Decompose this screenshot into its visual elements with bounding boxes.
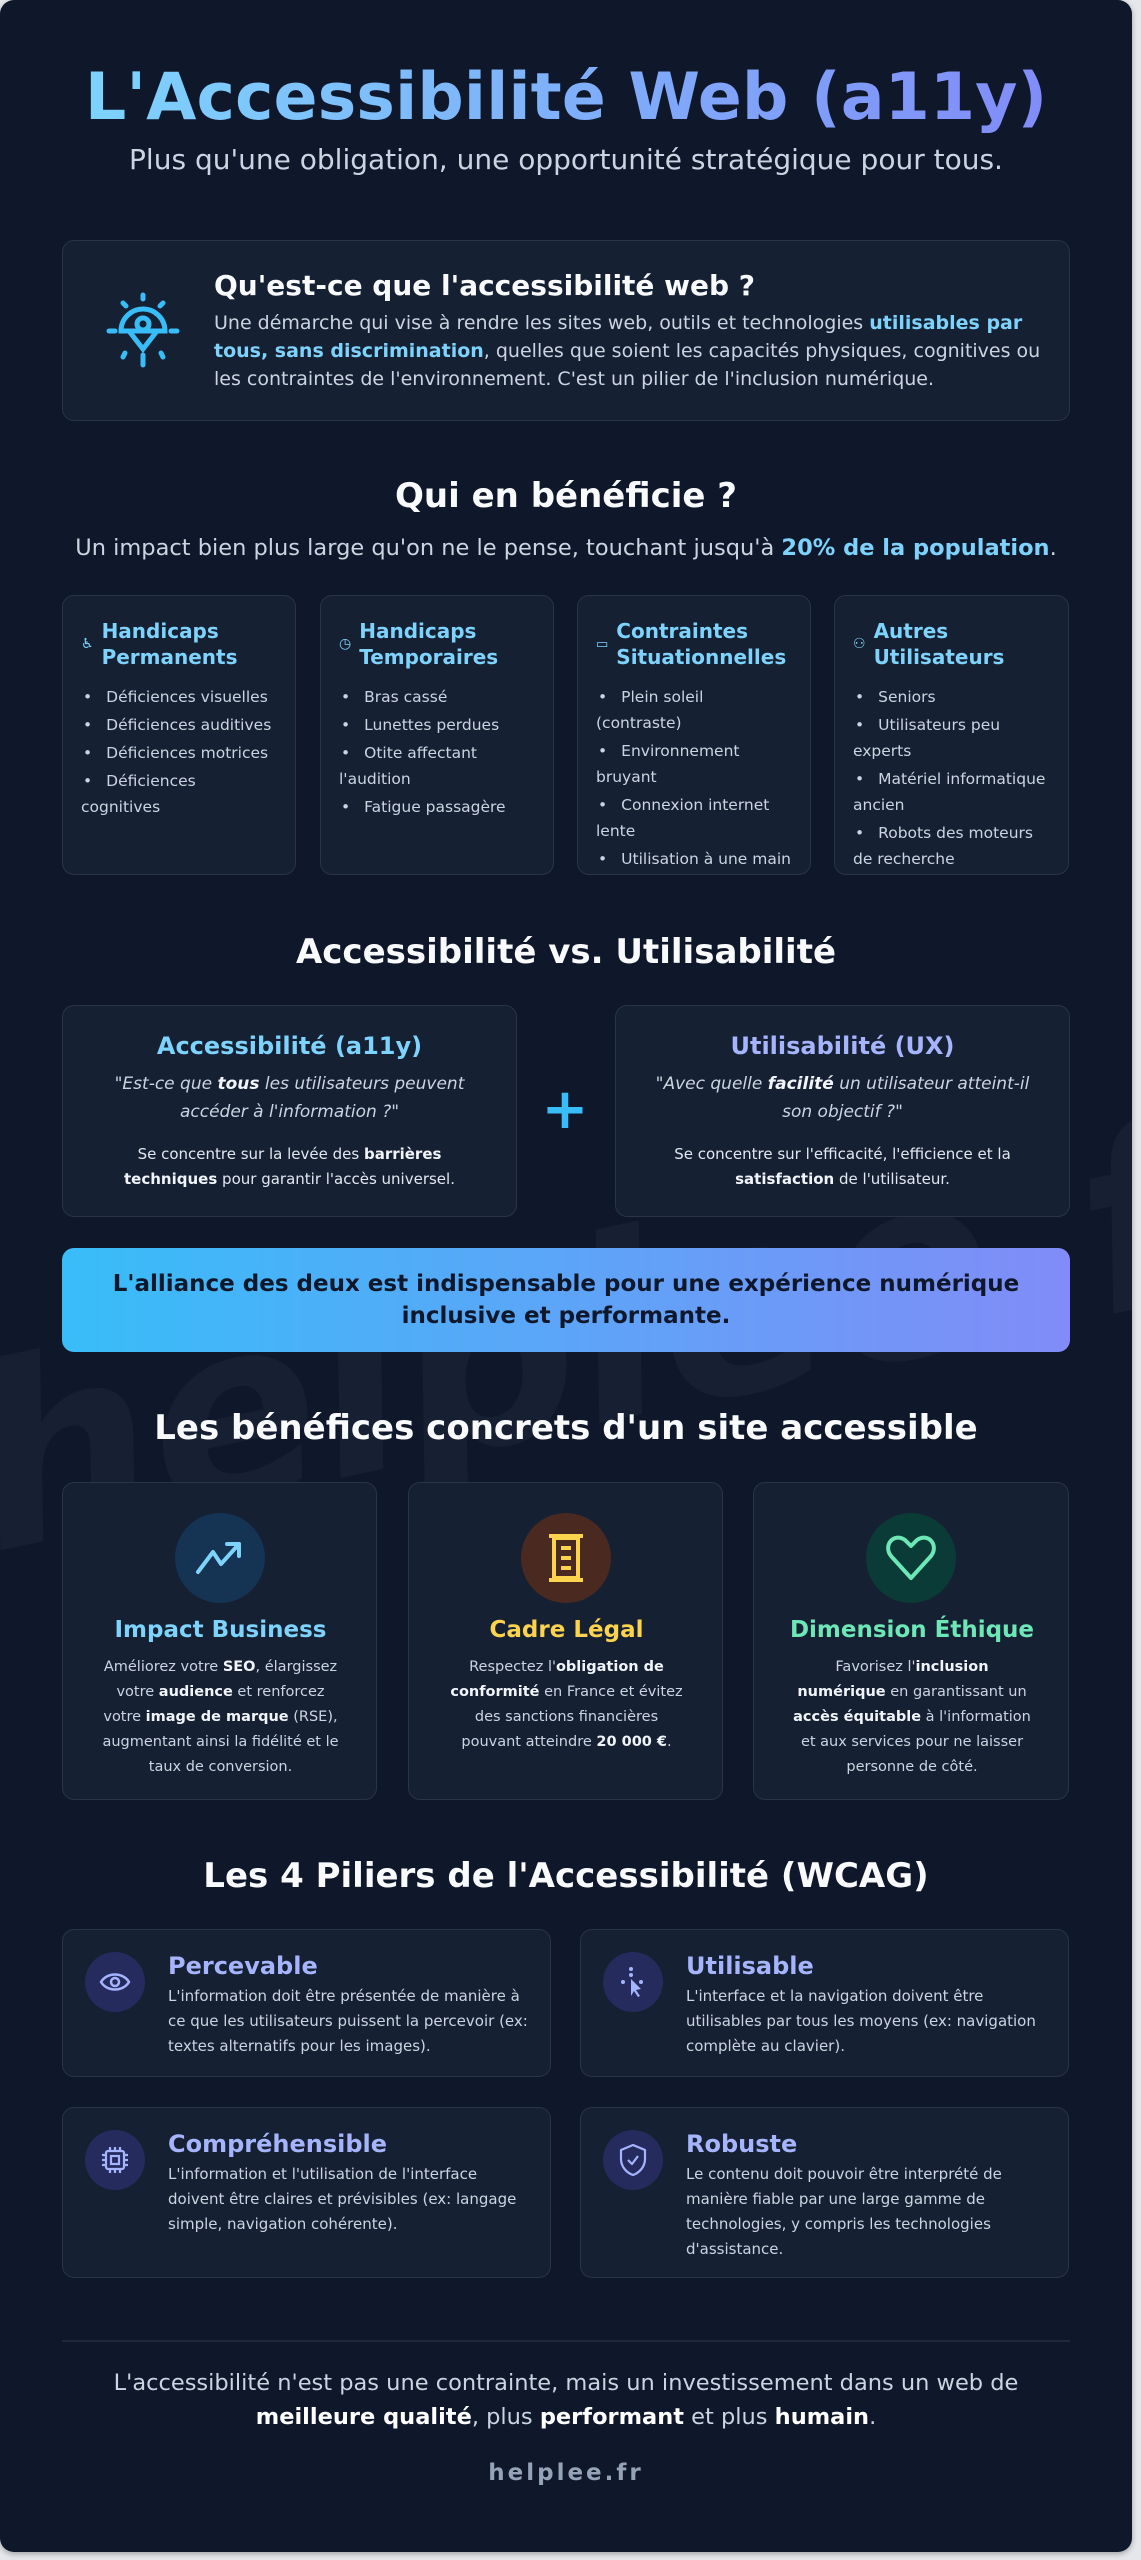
panel: utilisable: Utilisable	[686, 1952, 814, 1980]
panel: situationnelles: Situationnelles	[616, 645, 786, 669]
heading: bénéfices: Les bénéfices concrets d'un site accessible	[154, 1408, 978, 1448]
panel: percevable	[62, 1929, 551, 2077]
panel: autres: Seniors	[878, 688, 936, 706]
panel: permanents: ♿	[81, 636, 94, 652]
panel: légal: pouvant atteindre 20 000 €.	[461, 1734, 672, 1750]
panel: situationnelles	[577, 595, 811, 875]
panel: permanents: Déficiences cognitives	[81, 772, 196, 816]
panel: situationnelles: ▭	[596, 636, 608, 652]
icon: pointer	[603, 1952, 663, 2012]
panel: temporaires: Temporaires	[359, 645, 498, 669]
panel: compréhensible: Compréhensible	[168, 2130, 387, 2158]
panel: business: Impact Business	[114, 1617, 326, 1643]
title: L'Accessibilité Web (a11y)	[85, 60, 1047, 135]
panel: autres: Robots des moteurs de recherche	[853, 824, 1033, 868]
panel: temporaires: Handicaps	[359, 619, 476, 643]
heading: piliers WCAG: Les 4 Piliers de l'Accessibilité (WCAG)	[203, 1856, 929, 1896]
panel: permanents: Permanents	[102, 645, 238, 669]
icon: chip	[85, 2130, 145, 2190]
panel: percevable: Percevable	[168, 1952, 318, 1980]
icon: shield	[603, 2130, 663, 2190]
icon: heart	[866, 1513, 956, 1603]
panel: temporaires: Otite affectant l'audition	[339, 744, 477, 788]
panel: éthique: numérique en garantissant un accès équitable à l'information et aux services pour ne laisser personne de côté.	[793, 1684, 1031, 1775]
subheading: Un impact bien plus large qu'on ne le pense, touchant jusqu'à 20% de la population.	[75, 535, 1057, 561]
footer conclusion: L'accessibilité n'est pas une contrainte, mais un investissement dans un web de meilleure qualité, plus performant et plus humain.	[114, 2370, 1018, 2430]
panel: permanents: Déficiences motrices	[106, 744, 268, 762]
panel: compréhensible: L'information et l'utilisation de l'interface doivent être claires et prévisibles (ex: langage simple, navigation cohérente).	[168, 2165, 516, 2233]
icon: eye	[85, 1952, 145, 2012]
panel: business: Améliorez votre SEO, élargissez votre audience et renforcez votre image de marque (RSE), augmentant ainsi la fidélité et le taux de conversion.	[102, 1659, 339, 1775]
heading: accessibilité vs utilisabilité: Accessibilité vs. Utilisabilité	[296, 932, 836, 972]
panel: situationnelles: Utilisation à une main	[621, 850, 791, 868]
panel: temporaires	[320, 595, 554, 875]
panel: utilisabilité: Utilisabilité (UX)	[730, 1032, 954, 1060]
icon: plus: +	[542, 1077, 588, 1142]
panel: permanents: Déficiences auditives	[106, 716, 271, 734]
panel: accessibilité	[62, 1005, 517, 1217]
panel: accessibilité: "Est-ce que tous les utilisateurs peuvent accéder à l'information ?"	[115, 1074, 464, 1122]
definition text	[214, 269, 1040, 390]
callout: alliance	[62, 1248, 1070, 1352]
panel: temporaires: Bras cassé	[364, 688, 447, 706]
panel: éthique: Favorisez l'inclusion	[835, 1659, 989, 1675]
panel: autres: Utilisateurs	[874, 645, 1004, 669]
panel: accessibilité: Se concentre sur la levée des barrières techniques pour garantir l'accès universel.	[124, 1145, 455, 1188]
panel: autres: Utilisateurs peu experts	[853, 716, 1000, 760]
panel: situationnelles: Contraintes	[616, 619, 748, 643]
panel: utilisable	[580, 1929, 1069, 2077]
panel: accessibilité: Accessibilité (a11y)	[157, 1032, 422, 1060]
icon: trend	[175, 1513, 265, 1603]
icon: accessibility	[106, 292, 180, 368]
panel: autres	[834, 595, 1069, 875]
panel: permanents: Déficiences visuelles	[106, 688, 268, 706]
footer brand: helplee.fr	[488, 2460, 644, 2486]
panel: légal: Cadre Légal	[490, 1617, 643, 1643]
panel: robuste	[580, 2107, 1069, 2278]
panel: situationnelles: Environnement bruyant	[596, 742, 740, 786]
panel: situationnelles: Connexion internet lente	[596, 796, 769, 840]
panel: utilisable: L'interface et la navigation doivent être utilisables par tous les moyens (ex: navigation complète au clavier).	[686, 1987, 1036, 2055]
panel: utilisabilité: Se concentre sur l'efficacité, l'efficience et la satisfaction de l'utilisateur.	[674, 1145, 1011, 1188]
panel: temporaires: ◷	[339, 636, 351, 652]
panel: éthique: Dimension Éthique	[790, 1617, 1034, 1643]
panel: autres: Matériel informatique ancien	[853, 770, 1045, 814]
definition text: Une démarche qui vise à rendre les sites web, outils et technologies utilisables par tous, sans discrimination, quelles que soient les capacités physiques, cognitives ou les contraintes de l'environnement. C'est un pilier de l'inclusion numérique.	[214, 312, 1040, 390]
panel: permanents	[62, 595, 296, 875]
panel: éthique	[753, 1482, 1069, 1800]
panel: robuste: Robuste	[686, 2130, 797, 2158]
panel: autres: ⚇	[853, 636, 866, 652]
panel: légal	[408, 1482, 723, 1800]
panel: situationnelles: Plein soleil (contraste)	[596, 688, 703, 732]
definition text: Qu'est-ce que l'accessibilité web ?	[214, 269, 755, 302]
heading: qui en bénéficie: Qui en bénéficie ?	[395, 476, 737, 516]
panel: definition	[62, 240, 1070, 421]
panel: utilisabilité	[615, 1005, 1070, 1217]
panel: compréhensible	[62, 2107, 551, 2278]
panel: temporaires: Lunettes perdues	[364, 716, 499, 734]
panel: temporaires: Fatigue passagère	[364, 798, 506, 816]
panel: légal: Respectez l'obligation de conformité en France et évitez des sanctions financières	[450, 1659, 683, 1725]
subtitle: Plus qu'une obligation, une opportunité stratégique pour tous.	[129, 143, 1003, 176]
panel: business	[62, 1482, 377, 1800]
panel: autres: Autres	[874, 619, 948, 643]
panel: percevable: L'information doit être présentée de manière à ce que les utilisateurs puissent la percevoir (ex: textes alternatifs pour les images).	[168, 1987, 528, 2055]
callout: alliance: L'alliance des deux est indispensable pour une expérience numérique inclusive et performante.	[113, 1271, 1019, 1329]
panel: robuste: Le contenu doit pouvoir être interprété de manière fiable par une large gamme de technologies, y compris les technologies d'assistance.	[686, 2165, 1002, 2258]
panel: utilisabilité: "Avec quelle facilité un utilisateur atteint-il son objectif ?"	[656, 1074, 1029, 1122]
panel: permanents: Handicaps	[102, 619, 219, 643]
icon: scroll	[521, 1513, 611, 1603]
